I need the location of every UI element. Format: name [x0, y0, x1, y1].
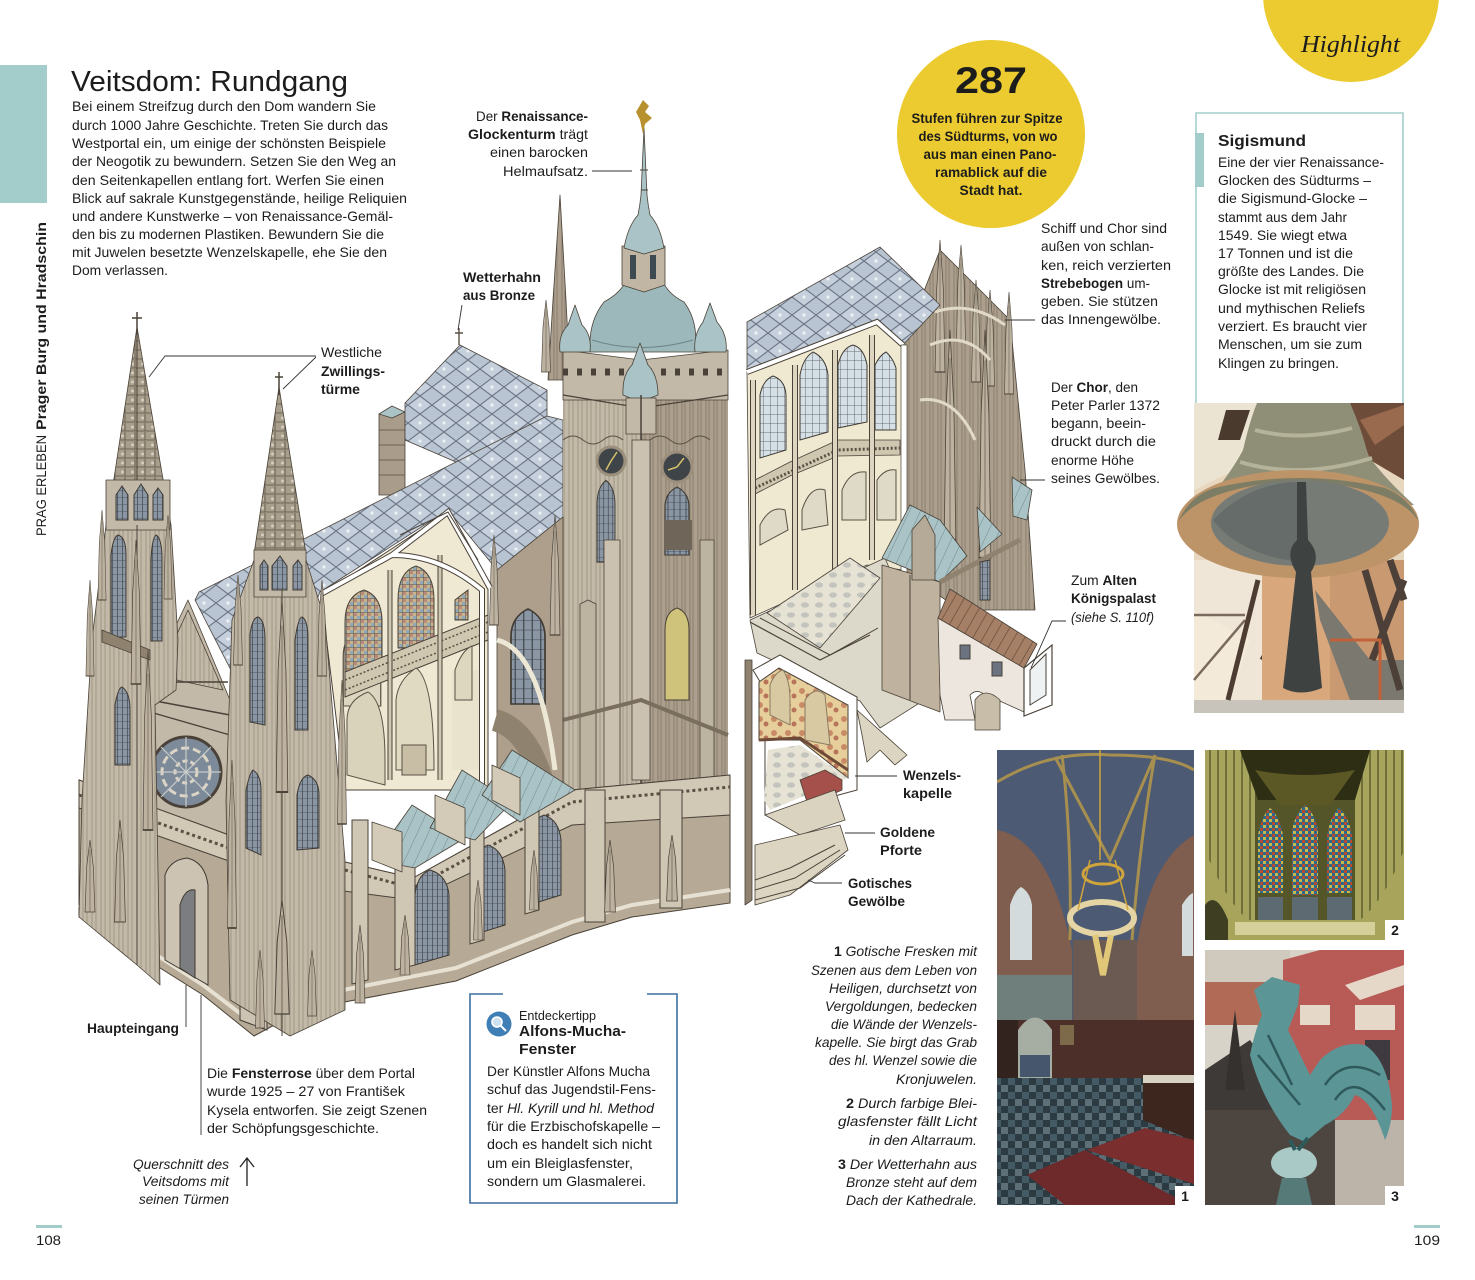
leader: weathercock [458, 305, 462, 330]
fresco walls [997, 830, 1072, 975]
cathedral illustration: east part [745, 240, 1052, 905]
photo captions: 2 Durch farbige Blei- [846, 1095, 977, 1111]
label: flying buttresses: Strebebogen um- [1041, 275, 1150, 291]
stat text: aus man einen Pano- [924, 146, 1057, 162]
intro text: Bei einem Streifzug durch den Dom wandern Sie [72, 98, 376, 114]
text: rose window: Kysela entworfen. Sie zeigt Szenen [207, 1102, 427, 1118]
label: main entrance: Haupteingang [87, 1020, 179, 1036]
tip heading: Fenster [519, 1041, 576, 1058]
gold mosaic window [665, 608, 689, 700]
label: choir: Der Chor, den [1051, 379, 1138, 395]
sidebar running title: PRAG ERLEBEN [33, 435, 49, 536]
label: weathercock: aus Bronze [463, 287, 535, 303]
leader: main entrance [185, 985, 187, 1027]
weathercock on rear roof [455, 328, 463, 345]
photo 1: Wenzel chapel interior [997, 750, 1194, 1205]
aisle windows [415, 870, 449, 965]
leader: choir [1020, 479, 1045, 481]
flank between nave and tower [490, 515, 563, 790]
west gable front [150, 600, 230, 900]
south tower upper belfry and dome [560, 100, 728, 800]
sidebar running title: Prager Burg und Hradschin [33, 222, 49, 430]
label: Renaissance tower: Helmaufsatz. [503, 163, 588, 179]
intro text: und andere Kunstwerke – von Renaissance-Gemäl- [72, 208, 393, 224]
stat text: ramablick auf die [935, 164, 1047, 180]
number 287: 287 [955, 60, 1027, 101]
Sigismund text: Menschen, um sie zum [1218, 336, 1362, 352]
stat text: Stadt hat. [960, 182, 1022, 198]
text: rose window: Die Fensterrose über dem Portal [207, 1065, 415, 1081]
label: Renaissance tower: einen barocken [490, 144, 588, 160]
tip text: Der Künstler Alfons Mucha [487, 1063, 650, 1079]
photo captions: Vergoldungen, bedecken [825, 998, 977, 1014]
label: twin towers: türme [321, 381, 360, 397]
Sigismund text: stammt aus dem Jahr [1218, 209, 1347, 225]
tip text: doch es handelt sich nicht [487, 1136, 652, 1152]
rear tower [379, 406, 405, 495]
photo 3 number: 3 [1391, 1188, 1399, 1204]
rose window [151, 737, 221, 807]
Sigismund text: die Sigismund-Glocke – [1218, 190, 1367, 206]
photo 3 number [1385, 1186, 1404, 1205]
finial [1271, 1147, 1317, 1179]
caption: cross-section: Querschnitt des [133, 1156, 229, 1172]
label: old royal palace: Königspalast [1071, 590, 1156, 606]
tip text: sondern um Glasmalerei. [487, 1173, 646, 1189]
photo: bell [1177, 403, 1419, 713]
caption: cross-section [133, 1156, 230, 1207]
leader: vault [808, 880, 842, 883]
label: choir: druckt durch die [1051, 433, 1156, 449]
accent bar [1195, 133, 1204, 187]
leader: royal palace [1031, 621, 1066, 668]
gold vane [636, 100, 652, 134]
nave interior cross-section [321, 512, 490, 790]
text: rose window: der Schöpfungsgeschichte. [207, 1120, 379, 1136]
Sigismund text: Eine der vier Renaissance- [1218, 154, 1384, 170]
stat circle: 287 steps [897, 40, 1085, 228]
chandelier [1070, 750, 1134, 975]
highlight badge: Highlight [1300, 32, 1401, 58]
portals [165, 858, 208, 985]
corridor to old royal palace [938, 589, 1052, 730]
label: Renaissance tower: Glockenturm trägt [468, 126, 588, 142]
label: old royal palace: Zum Alten [1071, 572, 1137, 588]
stat text: des Südturms, von wo [918, 128, 1058, 144]
sidebar running title [33, 222, 49, 536]
Sigismund text: verziert. Es braucht vier [1218, 318, 1367, 334]
label: old royal palace [1071, 572, 1156, 625]
photo captions: die Wände der Wenzels- [831, 1016, 977, 1032]
intro text: den Seitenkapellen entlang fort. Werfen Sie einen [72, 172, 384, 188]
intro text: mit Juwelen besetzte Wenzelskapelle, ehe Sie den [72, 244, 387, 260]
label: twin towers [321, 344, 385, 397]
text: rose window: wurde 1925 – 27 von František [206, 1083, 406, 1099]
photo captions [811, 943, 978, 1208]
intro text: Westportal ein, um einige der schönsten Beispiele [72, 135, 386, 151]
photo captions: des hl. Wenzel sowie die [829, 1052, 977, 1068]
aisle wall and portal base [79, 775, 730, 1036]
intro text: Dom verlassen. [72, 262, 168, 278]
photo captions: Heiligen, durchsetzt von [829, 980, 977, 996]
rooster body [1250, 977, 1392, 1142]
label: gothic vault: Gewölbe [848, 893, 905, 909]
label: Wenzel chapel [903, 767, 961, 801]
stat text: Stufen führen zur Spitze [912, 110, 1063, 126]
label: old royal palace: (siehe S. 110f) [1071, 609, 1154, 625]
tip heading [519, 1008, 626, 1058]
Sigismund heading: Sigismund [1218, 133, 1306, 150]
arrow up [240, 1158, 254, 1186]
crypt floor plan and walls [745, 660, 907, 905]
Sigismund text: größte des Landes. Die [1218, 263, 1364, 279]
label: choir: enorme Höhe [1051, 452, 1134, 468]
chapel roofs [372, 750, 575, 872]
label: twin towers: Zwillings- [321, 363, 385, 379]
photo captions: 3 Der Wetterhahn aus [838, 1156, 977, 1172]
floor [997, 1078, 1194, 1205]
label: flying buttresses: ken, reich verzierten [1041, 257, 1171, 273]
tip text: schuf das Jugendstil-Fens- [487, 1081, 656, 1097]
tip box [470, 994, 677, 1203]
Wenzel chapel [753, 655, 857, 815]
vault ribs [997, 754, 1194, 940]
tip text: für die Erzbischofskapelle – [487, 1118, 660, 1134]
label: Wenzel chapel: Wenzels- [903, 767, 961, 783]
photo captions: glasfenster fällt Licht [838, 1113, 978, 1129]
bell shape [1200, 403, 1414, 510]
Sigismund text: und mythischen Reliefs [1218, 300, 1365, 316]
Sigismund text: Glocken des Südturms – [1218, 172, 1371, 188]
photo captions: Bronze steht auf dem [846, 1174, 977, 1190]
leader: flying buttresses [1005, 319, 1035, 321]
caption: cross-section: seinen Türmen [139, 1191, 229, 1207]
label: Wenzel chapel: kapelle [903, 785, 952, 801]
photo captions: Kronjuwelen. [896, 1071, 977, 1087]
caption: cross-section: Veitsdoms mit [142, 1173, 230, 1189]
photo captions: kapelle. Sie birgt das Grab [815, 1034, 977, 1050]
label: flying buttresses: das Innengewölbe. [1041, 311, 1161, 327]
label: flying buttresses: geben. Sie stützen [1041, 293, 1158, 309]
intro text: der Neogotik zu bewundern. Setzen Sie den Weg an [72, 153, 396, 169]
dome [590, 280, 696, 352]
label: Renaissance tower [468, 108, 588, 179]
intro text [72, 98, 407, 278]
Sigismund text: 17 Tonnen und ist die [1218, 245, 1353, 261]
highlight badge [1263, 0, 1439, 82]
Sigismund text: Klingen zu bringen. [1218, 355, 1339, 371]
cathedral illustration: west part [79, 100, 730, 1036]
intro text: den bis zu modernen Plastiken. Bewundern Sie die [72, 226, 384, 242]
stat text [912, 110, 1063, 198]
label: gothic vault: Gotisches [848, 875, 912, 891]
clocks [597, 447, 625, 475]
label: flying buttresses: Schiff und Chor sind [1041, 220, 1167, 236]
nave roof [195, 416, 563, 680]
left west tower [79, 312, 178, 985]
label: twin towers: Westliche [321, 344, 382, 360]
tower windows [597, 480, 615, 562]
Sigismund text: 1549. Sie wiegt etwa [1218, 227, 1347, 243]
label: golden gate: Goldene [880, 824, 935, 840]
lantern cap [624, 128, 664, 254]
choir interior [747, 322, 907, 618]
intro text: Blick auf sakrale Kunstgegenstände, heilige Reliquien [72, 190, 407, 206]
page number 108: 108 [36, 1232, 61, 1248]
text: rose window [206, 1065, 427, 1136]
truss [321, 512, 490, 790]
leader: golden gate [845, 832, 875, 834]
crossing tower block [882, 505, 1020, 712]
Sigismund text [1218, 154, 1384, 371]
label: weathercock [463, 269, 541, 303]
page number 109: 109 [1414, 1232, 1440, 1248]
lantern [622, 246, 665, 292]
choir buttresses exterior [903, 240, 1035, 610]
photo captions: in den Altarraum. [869, 1132, 977, 1148]
photo captions: Szenen aus dem Leben von [811, 962, 977, 978]
photo 2 number [1385, 920, 1404, 940]
leader: rose window [200, 995, 202, 1135]
photo captions: 1 Gotische Fresken mit [834, 943, 978, 959]
tip heading: Alfons-Mucha- [519, 1023, 626, 1040]
photo 1 number: 1 [1181, 1188, 1189, 1204]
label: golden gate [880, 824, 935, 858]
tip text: um ein Bleiglasfenster, [487, 1155, 633, 1171]
choir roof [747, 247, 940, 372]
photo 2: stained glass [1205, 750, 1404, 940]
leader: Wenzel chapel [855, 775, 897, 777]
photo captions: Dach der Kathedrale. [846, 1192, 977, 1208]
label: choir [1051, 379, 1160, 486]
tall tower mullions [640, 395, 642, 800]
tip text: ter Hl. Kyrill und hl. Method [487, 1100, 655, 1116]
photo 1 number [1175, 1186, 1194, 1205]
clapper [1283, 482, 1322, 692]
leader: twin towers [149, 356, 316, 389]
photo 3: bronze weathercock [1205, 950, 1404, 1205]
thin spire behind tower [542, 195, 570, 380]
choir floor [750, 558, 940, 728]
sidebar tab [0, 65, 47, 203]
right west tower [226, 372, 346, 1036]
leader: tower label [592, 170, 632, 172]
corner turrets [560, 305, 590, 352]
title: Veitsdom: Rundgang [71, 66, 348, 98]
label: flying buttresses [1041, 220, 1171, 327]
Sigismund panel [1195, 113, 1403, 403]
label: Renaissance tower: Der Renaissance- [476, 108, 588, 124]
label: choir: begann, beein- [1051, 415, 1146, 431]
page number 109 [1414, 1225, 1440, 1248]
rear roof [405, 345, 547, 462]
tip heading: Entdeckertipp [519, 1008, 596, 1023]
label: gothic vault [848, 875, 912, 909]
intro text: durch 1000 Jahre Geschichte. Treten Sie durch das [72, 117, 388, 133]
icon: magnifier [486, 1012, 512, 1036]
page number 108 [36, 1225, 62, 1248]
photo 2 number: 2 [1391, 922, 1399, 938]
Sigismund text: Glocke ist mit religiösen [1218, 281, 1366, 297]
tower buttress bases [352, 790, 682, 984]
label: choir: Peter Parler 1372 [1051, 397, 1160, 413]
label: choir: seines Gewölbes. [1051, 470, 1160, 486]
label: weathercock: Wetterhahn [463, 269, 541, 285]
label: flying buttresses: außen von schlan- [1041, 238, 1154, 254]
altar wall [1018, 1020, 1194, 1078]
label: golden gate: Pforte [880, 842, 922, 858]
tip text [487, 1063, 660, 1189]
